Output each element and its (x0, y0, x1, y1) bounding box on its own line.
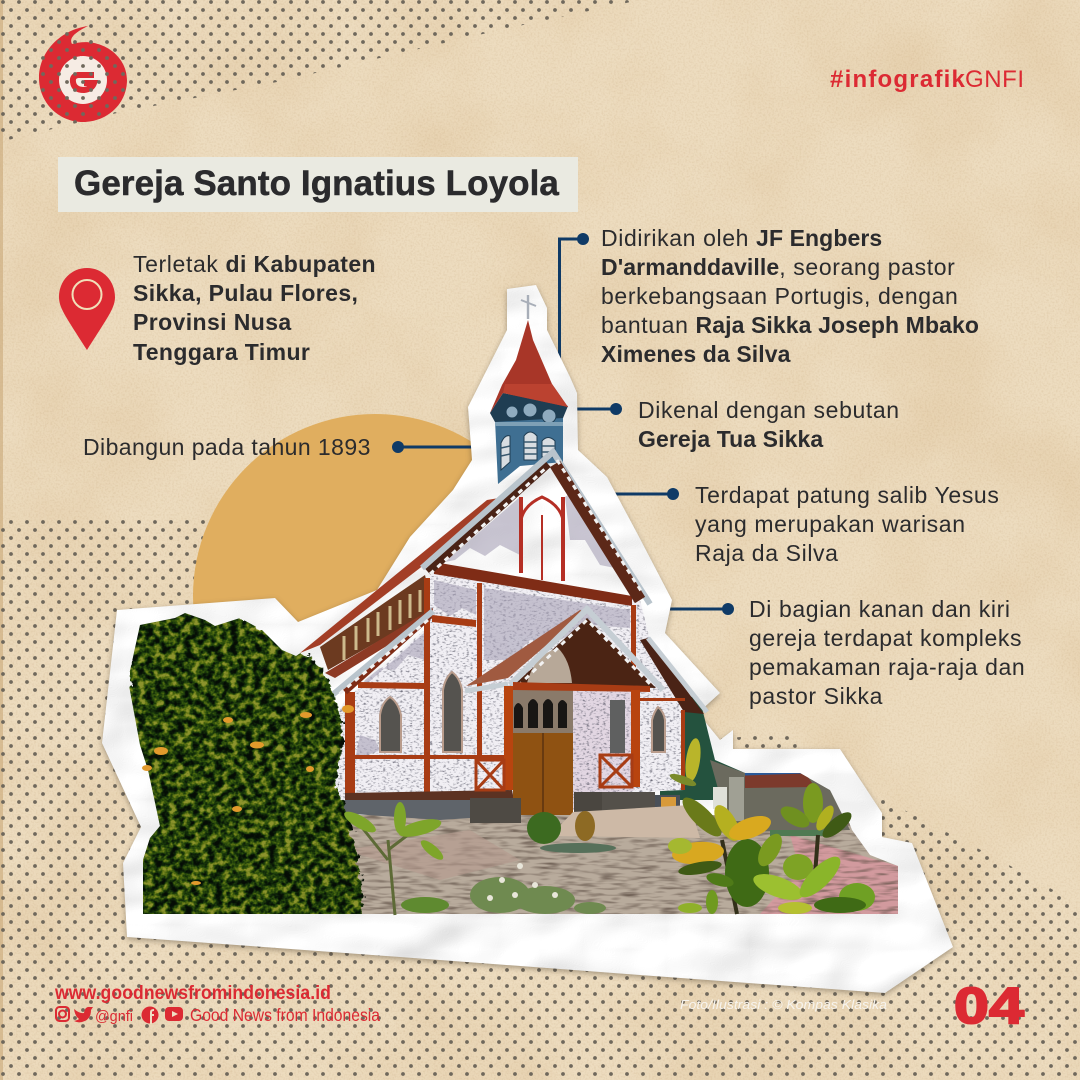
church: tower (490, 295, 568, 484)
photo credit: Foto/Ilustrasi : © Kompas Klasika (680, 997, 887, 1012)
text: cemetery: pastor Sikka (749, 683, 883, 709)
icon: youtube (165, 1007, 183, 1021)
hashtag (830, 66, 1024, 93)
hashtag: GNFI (965, 66, 1024, 93)
text: old church: Dikenal dengan sebutan (638, 397, 900, 423)
hashtag: #infografik (830, 66, 966, 93)
text: crucifix: Terdapat patung salib Yesus (695, 482, 999, 508)
text: founder: Ximenes da Silva (601, 341, 791, 367)
icon: facebook (142, 1006, 158, 1024)
page number: 04 (954, 977, 1025, 1034)
church: wall shadows (355, 490, 630, 760)
text: cemetery: Di bagian kanan dan kiri (749, 596, 1011, 622)
text: location: Terletak di Kabupaten (133, 251, 376, 277)
photo: ground and garden (130, 690, 910, 920)
dot pattern: top left (0, 0, 640, 145)
sun circle (193, 414, 557, 778)
photo: garden shrubs (341, 802, 606, 915)
text: founder: , seorang pastor (779, 254, 955, 280)
icon: location pin (59, 268, 115, 350)
title panel: Gereja Santo Ignatius Loyola (74, 164, 559, 203)
text: channel name: Good News from Indonesia (190, 1005, 380, 1025)
text: location: Provinsi Nusa (133, 309, 292, 335)
church: timber frame (345, 497, 636, 800)
leader: cemetery (670, 603, 734, 615)
leader: founder (560, 233, 589, 362)
leader: crucifix (604, 488, 679, 500)
church: porch (465, 609, 663, 815)
footer: website: www.goodnewsfromindonesia.id (54, 983, 331, 1004)
church: main gable bargeboards (422, 452, 650, 604)
text: crucifix: yang merupakan warisan (695, 511, 966, 537)
icon: twitter (74, 1007, 93, 1022)
leader: built year (392, 441, 472, 453)
church: nave roof (300, 497, 505, 670)
church: walls (320, 470, 684, 810)
church: left aisle roof (325, 608, 433, 697)
text: founder: Raja Sikka Joseph Mbako (696, 312, 979, 338)
photo: tree flowers (142, 705, 354, 885)
logo (39, 26, 127, 122)
church: right aisle roof (639, 638, 707, 790)
icon: instagram (56, 1007, 69, 1021)
text: location: Tenggara Timur (133, 339, 310, 365)
text: founder: bantuan (601, 312, 696, 338)
text: founder: berkebangsaan Portugis, dengan (601, 283, 958, 309)
torn white paper cutout (102, 285, 953, 993)
text: old church: Gereja Tua Sikka (638, 426, 823, 452)
text: cemetery: pemakaman raja-raja dan (749, 654, 1025, 680)
text: built year: Dibangun pada tahun 1893 (83, 434, 371, 460)
text: founder: Didirikan oleh JF Engbers (601, 225, 882, 251)
church: plinth and steps (325, 792, 700, 838)
footer: social row (56, 1005, 380, 1025)
text: location: Sikka, Pulau Flores, (133, 280, 358, 306)
text: twitter handle: @gnfi (95, 1008, 133, 1025)
church (300, 295, 707, 838)
church: windows (380, 672, 665, 753)
text: crucifix: Raja da Silva (695, 540, 839, 566)
title panel (58, 157, 578, 212)
text: founder: D'armanddaville (601, 254, 779, 280)
dot pattern: bottom (0, 518, 1080, 1080)
leader: old church (575, 403, 622, 415)
photo: tree bush (130, 610, 362, 920)
photo: foreground leaves (668, 737, 875, 914)
text: cemetery: gereja terdapat kompleks (749, 625, 1022, 651)
